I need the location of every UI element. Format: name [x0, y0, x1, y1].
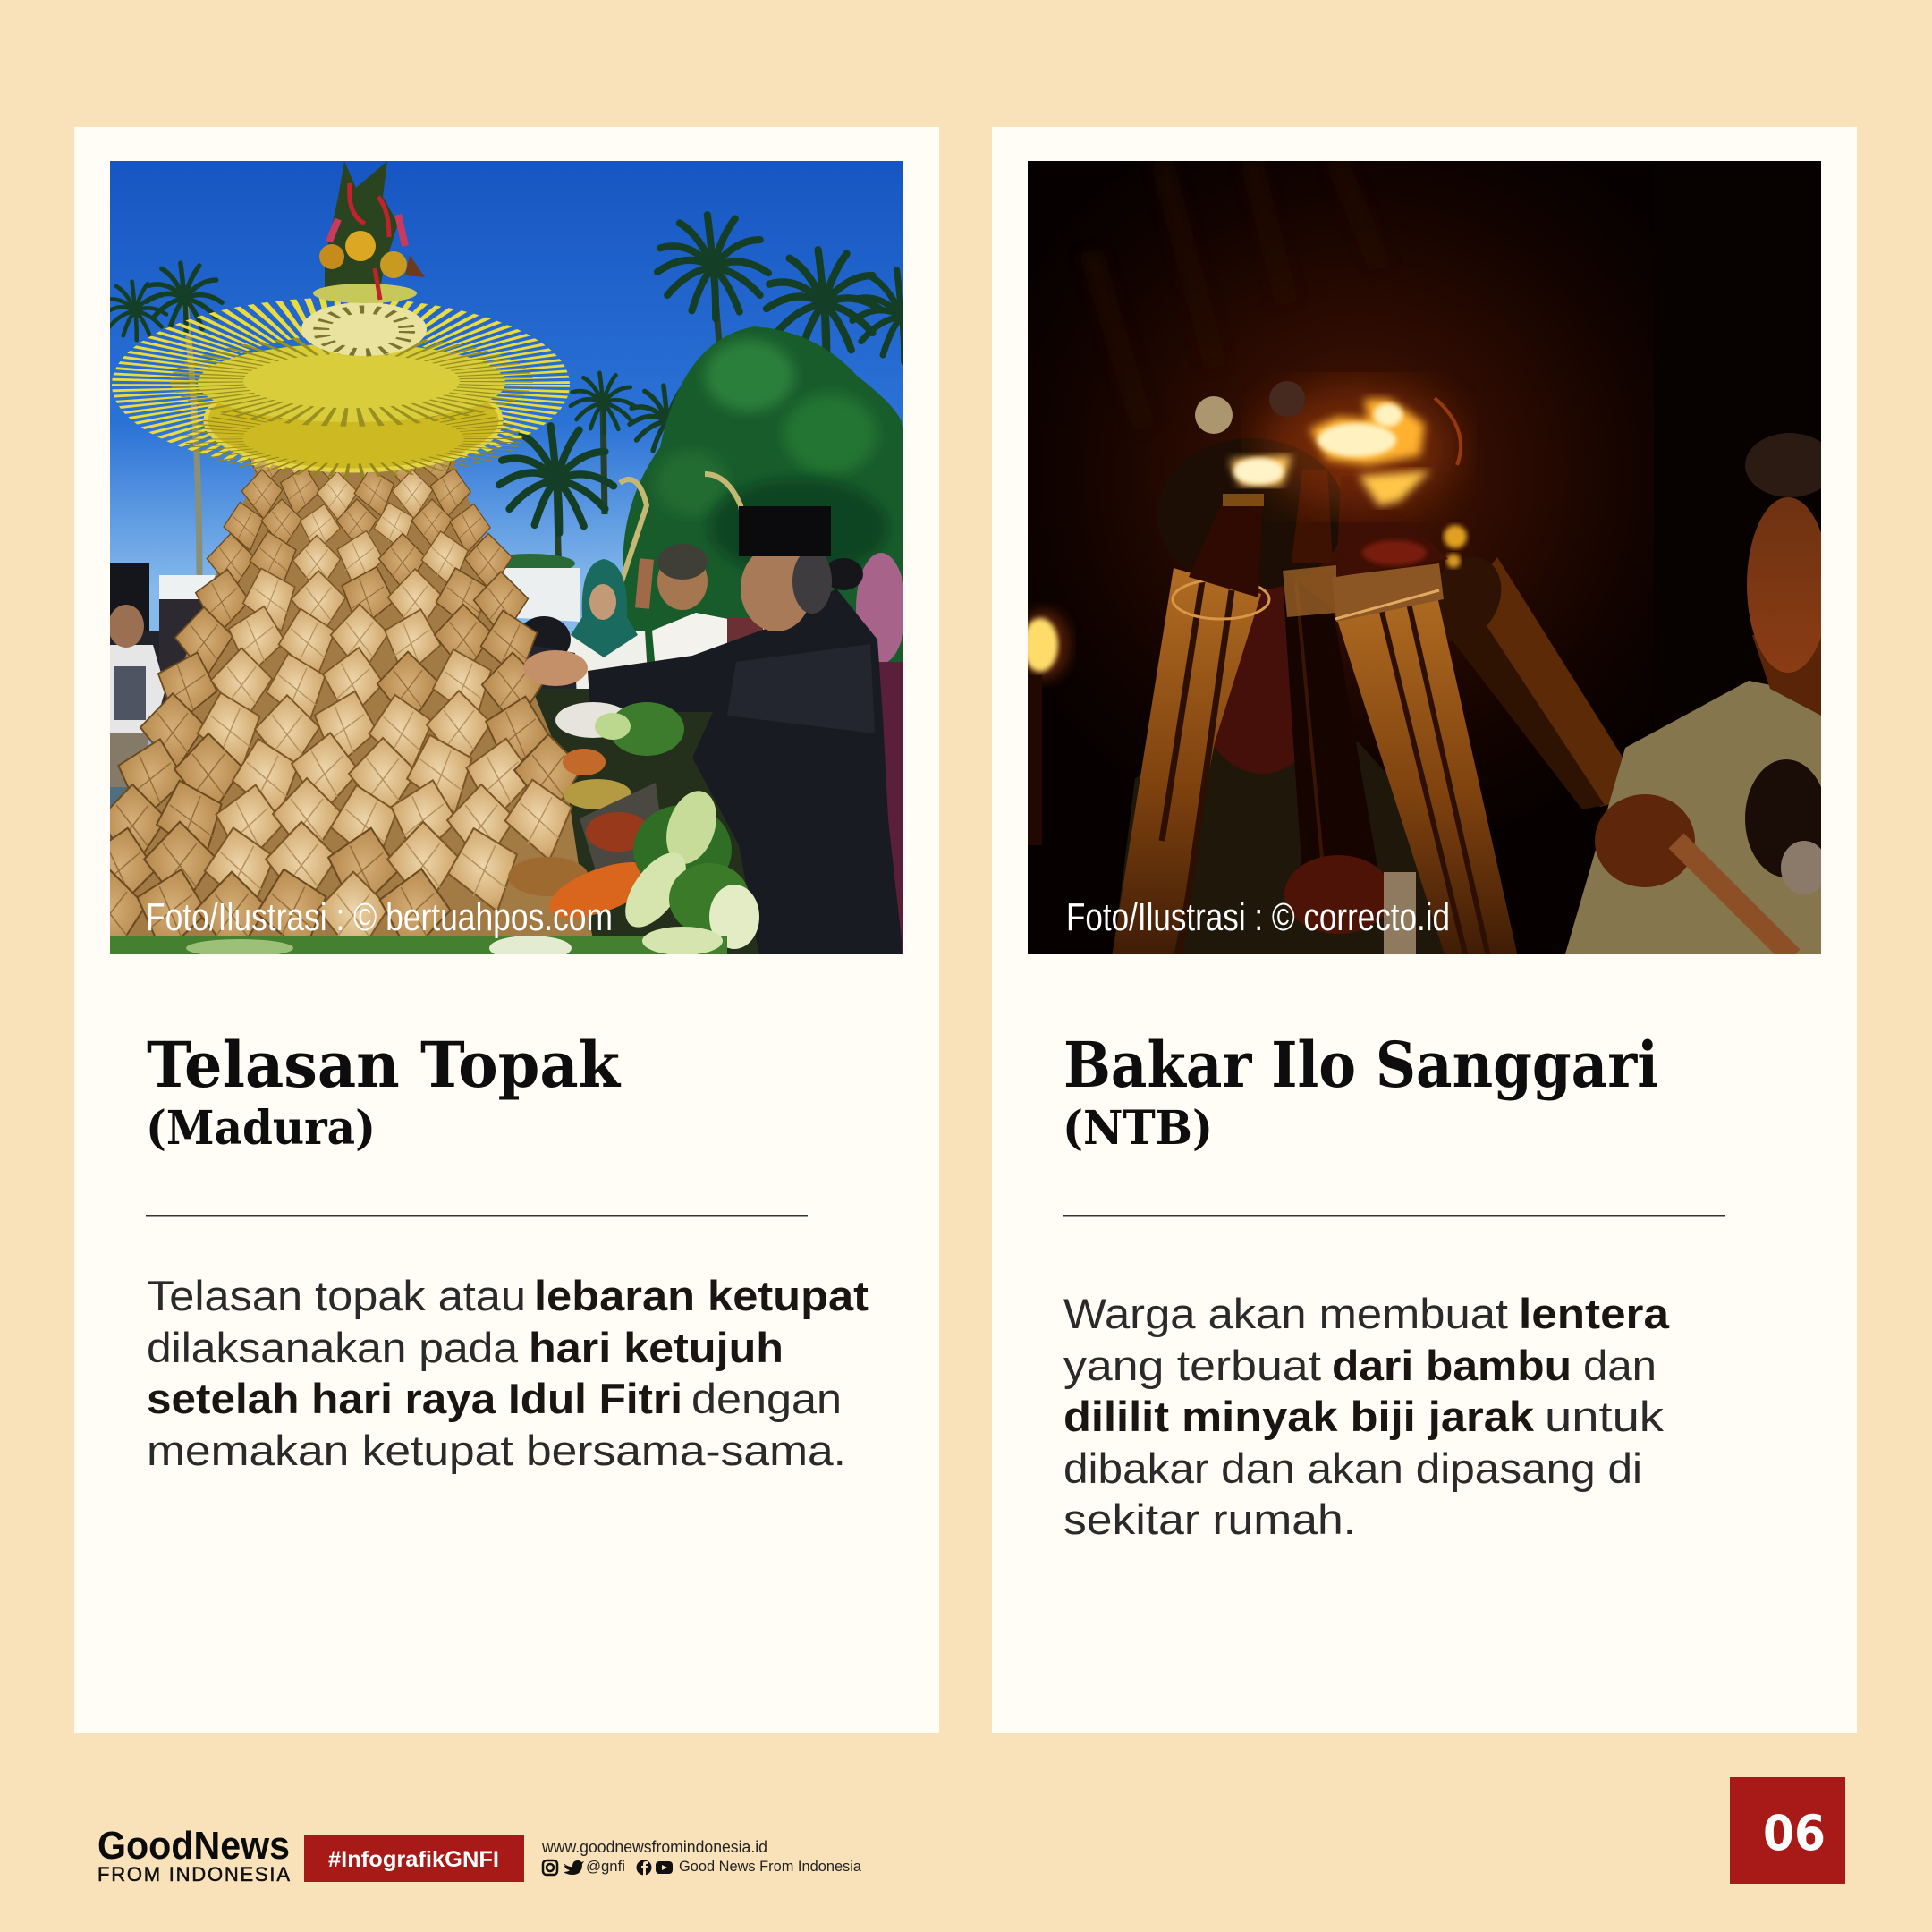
- hashtag badge: #InfografikGNFI: [328, 1847, 499, 1872]
- text block left: Telasan topak atau: [147, 1272, 526, 1319]
- torch right: [1441, 522, 1623, 809]
- photo credit left: Foto/Ilustrasi : © bertuahpos.com: [146, 895, 613, 939]
- website and social handles: www.goodnewsfromindonesia.id: [541, 1838, 767, 1856]
- page number badge: [1730, 1777, 1845, 1884]
- subheading: NTB: (NTB): [1063, 1101, 1213, 1156]
- text block right: dililit minyak biji jarak: [1063, 1393, 1535, 1440]
- fruit crown: [313, 161, 425, 303]
- person in the middle: [1113, 438, 1448, 957]
- left flame: [1017, 609, 1071, 845]
- card background right: [992, 127, 1857, 1733]
- torch left: [1112, 494, 1269, 957]
- text block right: [1063, 1290, 1670, 1543]
- text block right: Warga akan membuat: [1063, 1290, 1508, 1337]
- text block left: dilaksanakan pada: [147, 1324, 519, 1371]
- page number badge: 06: [1763, 1805, 1826, 1861]
- text block left: lebaran ketupat: [534, 1272, 869, 1319]
- text block left: [147, 1272, 869, 1474]
- website and social handles: Good News From Indonesia: [679, 1858, 862, 1875]
- text block right: sekitar rumah.: [1063, 1496, 1356, 1543]
- table base: [535, 689, 758, 954]
- website and social handles: @gnfi: [586, 1858, 625, 1875]
- card background left: [74, 127, 939, 1733]
- person on the right: [1564, 433, 1835, 957]
- panel: Bakar Ilo Sanggari: [992, 127, 1857, 1733]
- text block left: memakan ketupat bersama-sama.: [147, 1427, 846, 1474]
- photo credit right: Foto/Ilustrasi : © correcto.id: [1066, 895, 1450, 939]
- text block right: untuk: [1545, 1393, 1665, 1440]
- hashtag badge: [304, 1835, 524, 1882]
- ketupat cone: [110, 458, 592, 936]
- text block right: dan: [1583, 1342, 1657, 1389]
- decorative hat: [162, 302, 520, 472]
- hand in the middle: [1284, 855, 1416, 954]
- website and social handles: [541, 1838, 862, 1876]
- heading: Bakar Ilo Sanggari: Bakar Ilo Sanggari: [1063, 1028, 1658, 1102]
- text block right: dari bambu: [1332, 1342, 1572, 1389]
- text block left: hari ketujuh: [529, 1324, 784, 1371]
- text block left: dengan: [691, 1375, 842, 1422]
- text block right: dibakar dan akan dipasang di: [1063, 1445, 1642, 1492]
- background people: [517, 544, 906, 957]
- heading: Telasan Topak: Telasan Topak: [147, 1028, 621, 1102]
- torch middle: [1282, 470, 1379, 877]
- text block right: yang terbuat: [1063, 1342, 1321, 1389]
- glow and flames: [1195, 381, 1461, 510]
- panel: Telasan Topak: [74, 127, 951, 1733]
- icon: instagram: [543, 1860, 557, 1875]
- text block right: lentera: [1519, 1290, 1670, 1337]
- subheading: Madura: (Madura): [146, 1101, 376, 1156]
- man in black: [523, 506, 903, 957]
- torch centre: [1332, 476, 1518, 957]
- text block left: setelah hari raya Idul Fitri: [147, 1375, 682, 1422]
- photo: ketupat tower: [110, 161, 903, 954]
- footer logo: GoodNews From Indonesia: [97, 1824, 290, 1885]
- icon: facebook: [637, 1860, 651, 1876]
- icon: youtube: [656, 1861, 673, 1874]
- photo: bamboo torches: [1017, 161, 1835, 957]
- footer logo: GoodNews From Indonesia: GoodNews: [97, 1824, 290, 1868]
- food and lettuce: [110, 702, 759, 961]
- icon: twitter: [564, 1860, 584, 1875]
- footer logo: GoodNews From Indonesia: FROM INDONESIA: [97, 1863, 290, 1885]
